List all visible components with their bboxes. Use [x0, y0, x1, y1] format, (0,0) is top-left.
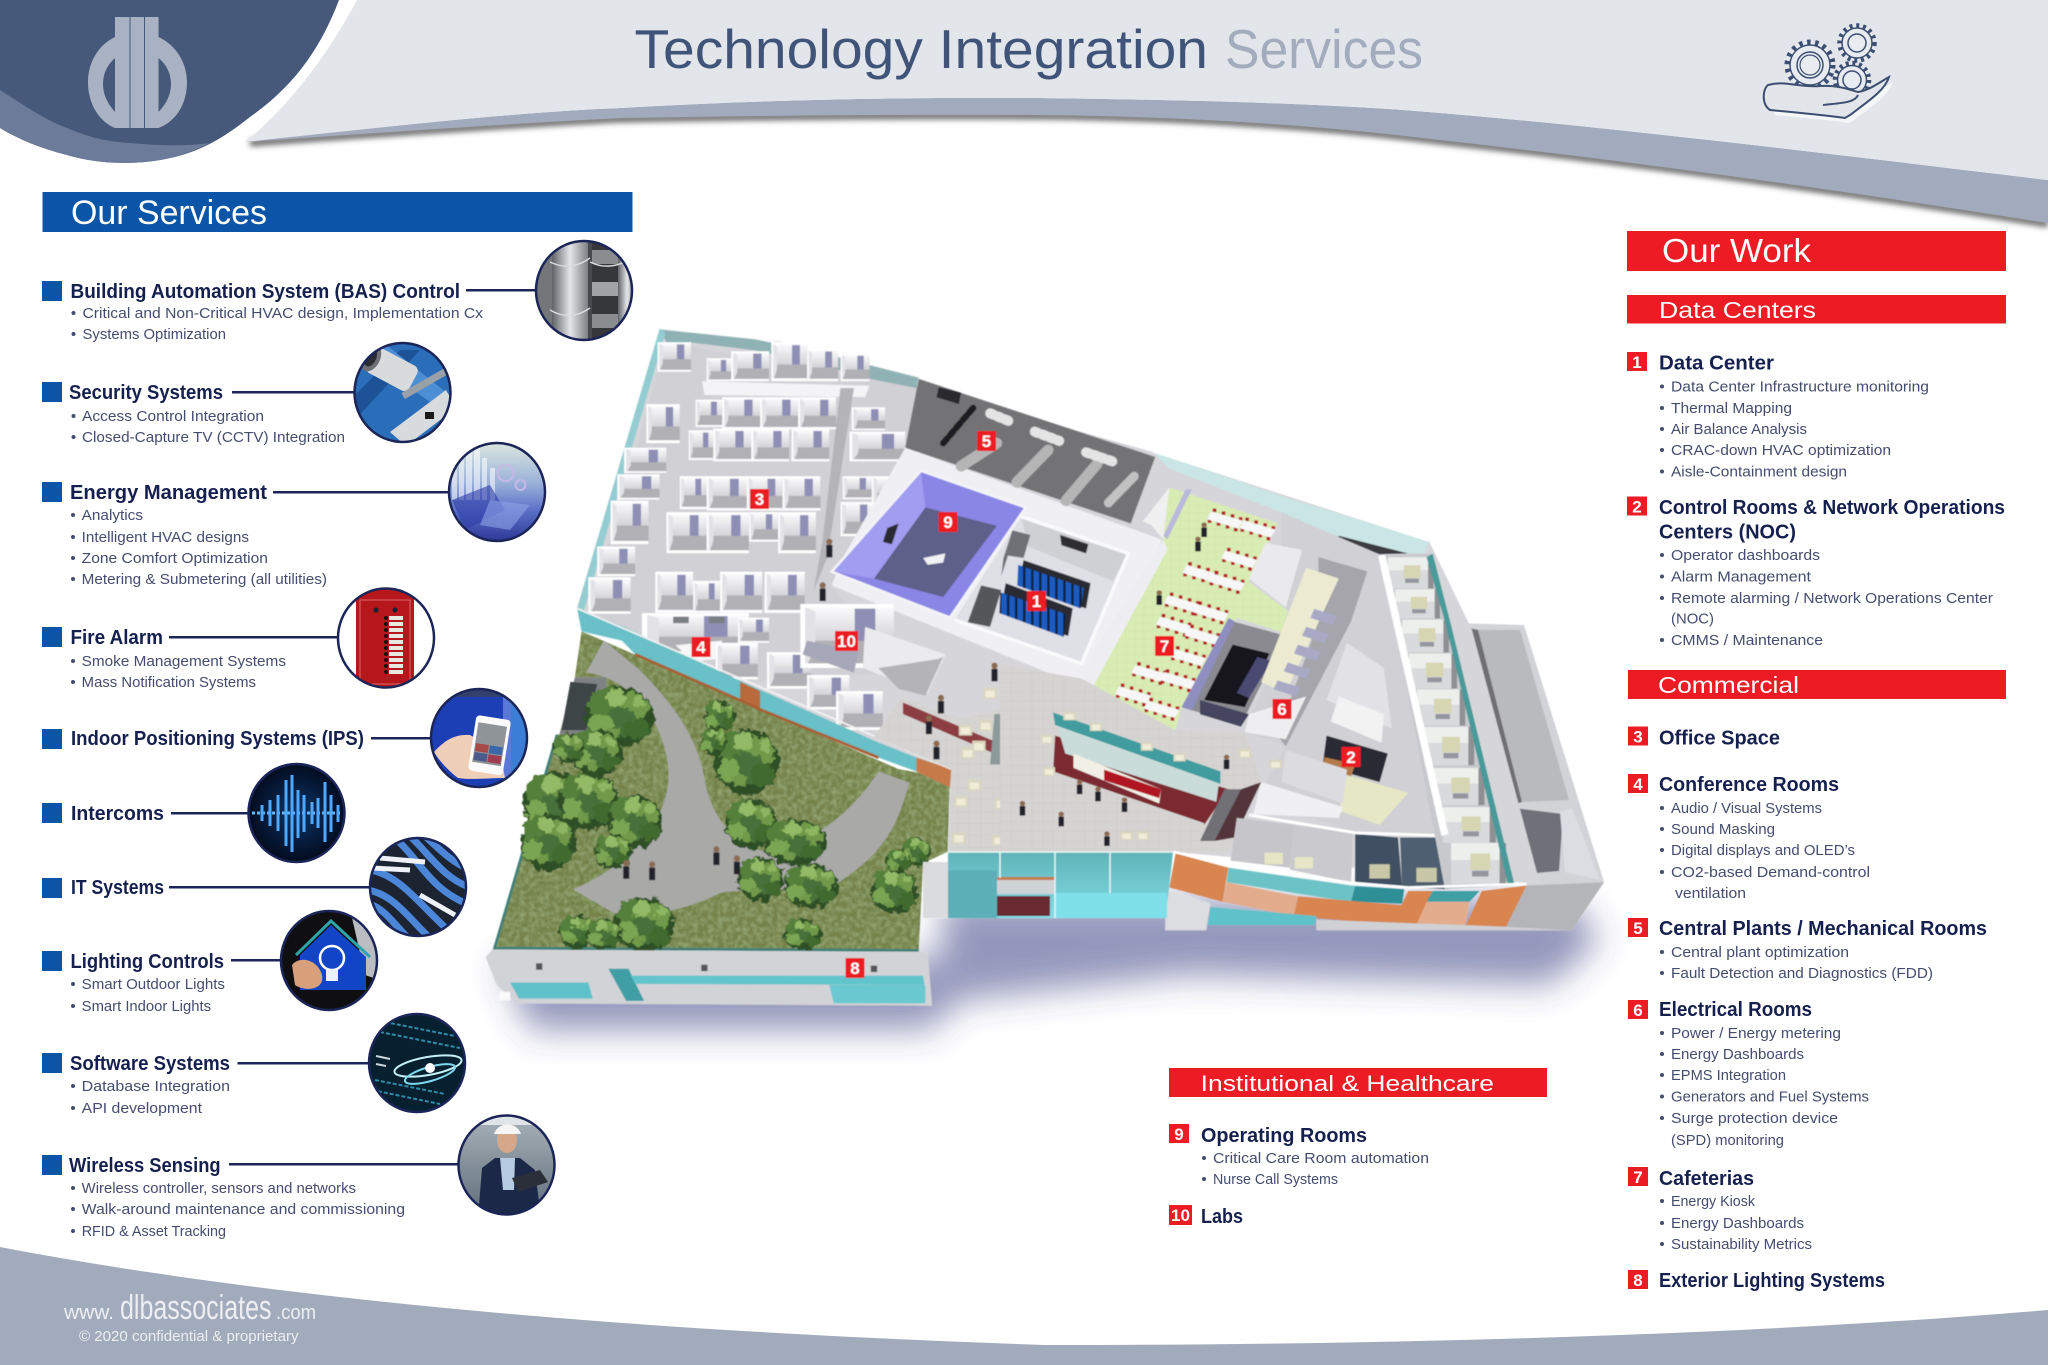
service: software systems	[42, 1053, 369, 1117]
service: software systems: Software Systems	[70, 1053, 230, 1075]
service: energy management	[42, 482, 449, 588]
service: lighting controls: Smart Indoor Lights	[82, 999, 211, 1015]
service: energy management: Metering & Submetering (all utilities)	[82, 572, 327, 588]
map tag 8	[846, 958, 864, 978]
map tag 5	[977, 431, 996, 451]
office rooms area 3	[588, 342, 916, 682]
panel: institutional and healthcare: Labs	[1201, 1206, 1243, 1228]
lobby floor and carpet	[820, 539, 1170, 852]
service: lighting controls	[42, 951, 281, 1015]
panel: services list	[42, 238, 638, 1240]
building cutaway illustration	[486, 328, 1604, 1030]
service: wireless sensing: Wireless Sensing	[69, 1155, 221, 1177]
service corridor and electrical rooms	[1245, 512, 1443, 834]
service: wireless sensing	[42, 1155, 458, 1240]
service: energy management: Energy Management	[70, 482, 267, 504]
panel: data centers: Centers (NOC)	[1659, 522, 1796, 544]
panel: commercial: Central plant optimization	[1671, 945, 1849, 961]
service: fire alarm: Fire Alarm	[70, 627, 163, 649]
panel: commercial: Power / Energy metering	[1671, 1026, 1841, 1042]
panel: data centers: Aisle-Containment design	[1671, 464, 1847, 480]
map tag 6	[1272, 699, 1292, 719]
service: energy management: Intelligent HVAC designs	[82, 530, 249, 546]
map tag 10: 10	[837, 632, 856, 651]
map tag 7	[1155, 636, 1174, 656]
panel: institutional and healthcare: 9	[1174, 1125, 1184, 1144]
panel: commercial: Digital displays and OLED’s	[1671, 843, 1855, 859]
terrace front wall	[486, 950, 932, 1006]
service: building automation: Systems Optimization	[82, 327, 226, 343]
panel: our work heading: Our Work	[1662, 232, 1812, 269]
panel: institutional and healthcare: Critical Care Room automation	[1213, 1151, 1429, 1167]
labs and lower rooms	[642, 604, 945, 730]
central block walls	[832, 448, 1162, 689]
control room 2	[1253, 736, 1408, 825]
map tag 2	[1342, 747, 1360, 767]
service: fire alarm	[42, 627, 338, 691]
service: software systems: API development	[82, 1101, 202, 1117]
panel: commercial: 8	[1633, 1271, 1643, 1290]
icon: security camera photo	[353, 342, 452, 444]
service: fire alarm: Mass Notification Systems	[82, 675, 256, 691]
panel: data centers: Alarm Management	[1671, 570, 1811, 586]
panel: commercial: Surge protection device	[1671, 1111, 1838, 1127]
service: building automation: Building Automation System (BAS) Control	[70, 281, 460, 303]
panel: data centers: 1	[1632, 353, 1642, 372]
service: IT systems	[42, 877, 370, 899]
icon: dlb logo mark	[88, 17, 187, 128]
map tag 7: 7	[1160, 637, 1169, 656]
north-east window strip	[1153, 452, 1429, 554]
panel: commercial: Sound Masking	[1671, 822, 1775, 838]
service: software systems: Database Integration	[82, 1079, 230, 1095]
map tag 1	[1027, 591, 1046, 611]
operating room 9	[832, 471, 1026, 618]
panel: data centers: 2	[1632, 498, 1642, 516]
title: Services	[1225, 18, 1423, 80]
panel: institutional and healthcare: Institutional & Healthcare	[1201, 1071, 1494, 1096]
map tag 4	[692, 637, 710, 657]
lobby glazing	[923, 852, 1173, 918]
panel: commercial: Central Plants / Mechanical Rooms	[1659, 918, 1987, 940]
service: wireless sensing: Walk-around maintenance and commissioning	[82, 1202, 405, 1218]
icon: gears in hand	[1764, 26, 1893, 123]
panel: data centers: Operator dashboards	[1671, 548, 1820, 564]
panel: commercial: Sustainability Metrics	[1671, 1237, 1812, 1253]
service: lighting controls: Lighting Controls	[70, 951, 224, 973]
panel: commercial: Commercial	[1658, 672, 1799, 698]
service: building automation: Critical and Non-Critical HVAC design, Implementation Cx	[82, 306, 484, 322]
map tag 6: 6	[1277, 700, 1287, 719]
map tag 2: 2	[1346, 748, 1356, 767]
front facade	[1165, 852, 1604, 930]
map tag 5: 5	[982, 432, 991, 451]
panel: commercial: ventilation	[1675, 886, 1746, 902]
panel: our services heading: Our Services	[71, 194, 267, 232]
service: intercoms: Intercoms	[71, 803, 164, 825]
icon: phone in hand photo	[430, 688, 530, 790]
glass wall	[577, 608, 951, 787]
service: security	[42, 382, 355, 446]
panel: institutional and healthcare: Operating Rooms	[1201, 1125, 1367, 1147]
icon: smart bulb photo	[279, 909, 379, 1012]
panel: commercial: Energy Dashboards	[1671, 1047, 1804, 1063]
map tag 1: 1	[1032, 592, 1041, 611]
service: building automation	[42, 281, 537, 343]
panel: data centers: Remote alarming / Network Operations Center	[1671, 591, 1993, 607]
icon: pipes photo	[534, 240, 634, 342]
panel: commercial: Energy Kiosk	[1671, 1194, 1756, 1210]
panel: data centers: CMMS / Maintenance	[1671, 633, 1823, 649]
map tag 9: 9	[943, 513, 953, 532]
footer band: dlbassociates	[120, 1289, 272, 1327]
icon: energy data photo	[445, 440, 549, 544]
panel: commercial: 7	[1633, 1168, 1643, 1187]
service: intercoms	[42, 803, 248, 825]
service: security: Closed-Capture TV (CCTV) Integration	[82, 430, 345, 446]
service: lighting controls: Smart Outdoor Lights	[82, 977, 225, 993]
panel: institutional and healthcare: 10	[1171, 1206, 1190, 1225]
data center room 1	[954, 517, 1128, 664]
panel: institutional and healthcare	[1169, 1068, 1547, 1228]
panel: data centers: Data Center Infrastructure monitoring	[1671, 380, 1929, 396]
panel: commercial: Conference Rooms	[1659, 774, 1839, 796]
panel: institutional and healthcare: Nurse Call Systems	[1213, 1172, 1338, 1188]
panel: commercial: (SPD) monitoring	[1671, 1133, 1784, 1149]
panel: data centers: (NOC)	[1671, 612, 1714, 628]
icon: fire alarm panel photo	[336, 586, 436, 690]
map tag 3	[750, 489, 769, 509]
footer band: www.	[63, 1302, 114, 1324]
panel: commercial: Energy Dashboards	[1671, 1216, 1804, 1232]
logo badge	[0, 0, 339, 163]
cafeteria 7	[1082, 487, 1288, 730]
footer band	[0, 1247, 2048, 1365]
service: fire alarm: Smoke Management Systems	[82, 654, 286, 670]
panel: commercial: Cafeterias	[1659, 1168, 1754, 1190]
map tag 4: 4	[696, 638, 706, 657]
service: security: Access Control Integration	[82, 409, 264, 425]
garden terrace	[495, 631, 950, 953]
map tag 8: 8	[850, 959, 860, 978]
panel: commercial: Electrical Rooms	[1659, 999, 1812, 1021]
south offices	[1231, 815, 1478, 889]
map tag 3: 3	[755, 490, 764, 509]
service: energy management: Analytics	[82, 508, 143, 524]
footer band: © 2020 confidential & proprietary	[79, 1328, 299, 1345]
lobby and food counter	[1000, 664, 1282, 852]
icon: network cables photo	[368, 836, 472, 938]
stair core	[1182, 618, 1286, 727]
panel: data centers: Data Centers	[1659, 297, 1816, 323]
panel: commercial: 3	[1633, 728, 1643, 746]
panel: commercial: Exterior Lighting Systems	[1659, 1270, 1885, 1292]
panel: commercial	[1628, 670, 2006, 1292]
panel: data centers: CRAC-down HVAC optimization	[1671, 443, 1891, 459]
panel: our work heading	[1627, 231, 2006, 271]
wing roof	[1451, 623, 1604, 886]
window strip north	[577, 328, 919, 611]
panel: commercial: EPMS Integration	[1671, 1068, 1786, 1084]
panel: commercial: CO2-based Demand-control	[1671, 865, 1870, 881]
map tag 9	[938, 512, 958, 532]
panel: data centers: Data Center	[1659, 352, 1774, 374]
icon: engineer photo	[456, 1113, 558, 1218]
east perimeter offices	[1382, 554, 1514, 889]
header swoosh	[245, 0, 2048, 224]
panel: data centers	[1627, 295, 2006, 649]
panel: commercial: Audio / Visual Systems	[1671, 801, 1822, 817]
panel: data centers: Thermal Mapping	[1671, 401, 1792, 417]
footer band: .com	[276, 1302, 316, 1324]
service: security: Security Systems	[69, 382, 223, 404]
mechanical plant room 5	[905, 379, 1155, 523]
service: IT systems: IT Systems	[71, 877, 164, 899]
panel: commercial: 5	[1633, 919, 1643, 938]
panel: data centers: Control Rooms & Network Operations	[1659, 497, 2005, 519]
icon: sound wave photo	[246, 762, 348, 864]
panel: commercial: Generators and Fuel Systems	[1671, 1090, 1869, 1106]
title: Technology Integration	[634, 18, 1208, 80]
panel: commercial: Office Space	[1659, 728, 1780, 750]
service: wireless sensing: RFID & Asset Tracking	[82, 1224, 226, 1240]
icon: code swirl photo	[367, 1012, 469, 1114]
service: indoor positioning: Indoor Positioning Systems (IPS)	[71, 728, 364, 750]
panel: commercial: Fault Detection and Diagnostics (FDD)	[1671, 966, 1933, 982]
service: wireless sensing: Wireless controller, sensors and networks	[82, 1181, 356, 1197]
panel: commercial: 4	[1633, 775, 1643, 794]
panel: our services heading	[42, 192, 632, 232]
service: energy management: Zone Comfort Optimization	[82, 551, 268, 567]
panel: data centers: Air Balance Analysis	[1671, 422, 1807, 438]
panel: commercial: 6	[1633, 1001, 1643, 1020]
